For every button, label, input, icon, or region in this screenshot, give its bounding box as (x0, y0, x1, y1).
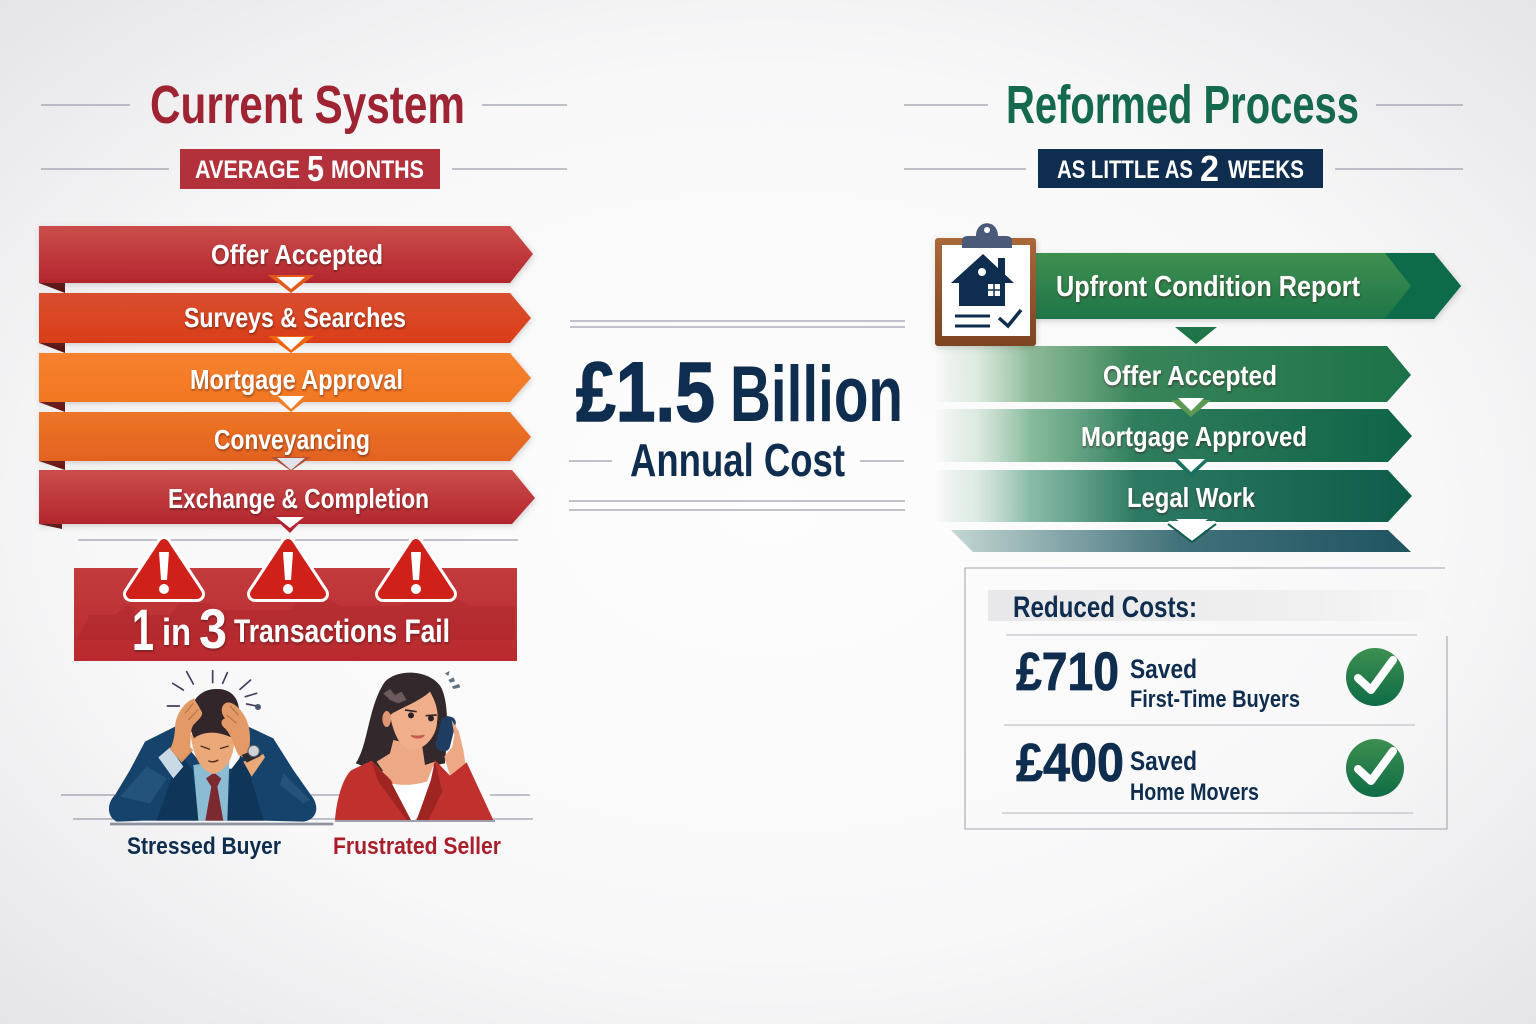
jacket (109, 727, 316, 822)
badge: as little as 2 weeks: WEEKS (1228, 156, 1304, 184)
caption: Stressed Buyer: Stressed Buyer (127, 833, 281, 860)
hair (356, 673, 447, 772)
jacket (335, 760, 493, 820)
arrow 3 (1168, 519, 1216, 542)
arrow 5 (272, 516, 306, 533)
step: Upfront Condition Report: Upfront Condition Report (1056, 271, 1360, 303)
blouse (392, 782, 427, 820)
step: blank final ribbon (951, 530, 1411, 552)
arrow 1 (268, 275, 314, 293)
right hand (221, 703, 250, 758)
arrow 3 (270, 395, 312, 412)
icon: check 2 (1346, 739, 1404, 797)
text: 1 in 3 Transactions Fail: in (162, 612, 191, 654)
row: £710 saved: Saved (1130, 654, 1197, 684)
illustration: frustrated seller (335, 671, 495, 821)
arrow 2 (268, 336, 314, 353)
icon: clipboard with house (935, 223, 1036, 346)
headline stat: £1.5 Billion: £1.5 (576, 345, 715, 439)
arrow (1175, 327, 1217, 344)
step: Offer Accepted: Offer Accepted (211, 239, 383, 270)
neck and chest (377, 740, 435, 785)
row: £400 saved: Saved (1130, 746, 1197, 776)
badge: average 5 months: MONTHS (331, 156, 424, 184)
heading band: Reduced Costs (988, 590, 1452, 624)
step: Exchange & Completion (39, 470, 535, 529)
step: Mortgage Approved: Mortgage Approved (1081, 421, 1307, 452)
headline stat: £1.5 Billion (576, 345, 903, 439)
left hand (171, 698, 202, 759)
badge: as little as 2 weeks: 2 (1200, 148, 1219, 189)
row: £400 saved: Home Movers (1130, 779, 1259, 806)
hand (444, 720, 466, 776)
headline stat: £1.5 Billion: Billion (730, 349, 903, 438)
watch (242, 748, 261, 763)
arrow 4 (271, 457, 311, 471)
icon: warning triangle 2 (255, 544, 321, 594)
step: Mortgage Approval (39, 353, 531, 412)
row: £400 saved (1016, 733, 1404, 806)
text: 1 in 3 Transactions Fail: 1 (132, 598, 154, 663)
title: Reformed Process: Reformed Process (1006, 75, 1359, 135)
step: Conveyancing (39, 412, 531, 470)
icon: warning triangle 1 (131, 544, 197, 594)
icon: warning triangle 3 (383, 544, 449, 594)
banner: 1 in 3 transactions fail (74, 544, 517, 663)
badge: as little as 2 weeks: AS LITTLE AS (1057, 156, 1193, 184)
badge: average 5 months: AVERAGE (195, 156, 300, 184)
step: Surveys & Searches (39, 293, 531, 353)
caption: Frustrated Seller: Frustrated Seller (333, 833, 501, 860)
step: Mortgage Approved (935, 409, 1412, 462)
icon: check 1 (1346, 648, 1404, 706)
badge: average 5 months: 5 (307, 148, 324, 189)
panel: reduced costs (965, 568, 1452, 829)
text: 1 in 3 Transactions Fail: Transactions Fail (234, 613, 450, 649)
face (191, 731, 234, 774)
title: Current System: Current System (150, 75, 465, 135)
step: Exchange & Completion: Exchange & Completion (168, 483, 429, 514)
face (390, 692, 438, 750)
text: 1 in 3 Transactions Fail (132, 597, 450, 663)
heading band: Reduced Costs: Reduced Costs: (1013, 591, 1197, 624)
step: Mortgage Approval: Mortgage Approval (190, 364, 403, 395)
step: Offer Accepted (39, 226, 533, 293)
row: £710 saved: First-Time Buyers (1130, 686, 1300, 713)
right forearm (243, 754, 265, 777)
step: Surveys & Searches: Surveys & Searches (184, 302, 406, 333)
row: £710 saved (1016, 642, 1404, 713)
text: 1 in 3 Transactions Fail: 3 (199, 597, 227, 660)
step: Legal Work: Legal Work (1127, 482, 1255, 513)
left cuff and forearm (158, 747, 183, 778)
step: Legal Work (935, 470, 1412, 522)
arrow 2 (1173, 459, 1209, 477)
phone (434, 715, 457, 753)
badge: average 5 months (180, 148, 440, 189)
arrow 1 (1171, 398, 1211, 417)
illustration: stressed buyer (109, 671, 333, 824)
step: Conveyancing: Conveyancing (214, 424, 370, 455)
panel: reformed process ribbons (935, 253, 1461, 552)
badge: as little as 2 weeks (1038, 148, 1323, 189)
step: Offer Accepted (935, 346, 1411, 402)
step: Offer Accepted: Offer Accepted (1103, 360, 1277, 391)
subheading: Annual Cost: Annual Cost (630, 434, 845, 486)
row: £710 saved: £710 (1016, 642, 1119, 702)
row: £400 saved: £400 (1016, 733, 1124, 793)
panel: current system process ribbons (39, 226, 535, 533)
hair (189, 689, 239, 738)
step: Upfront Condition Report (1030, 253, 1461, 319)
